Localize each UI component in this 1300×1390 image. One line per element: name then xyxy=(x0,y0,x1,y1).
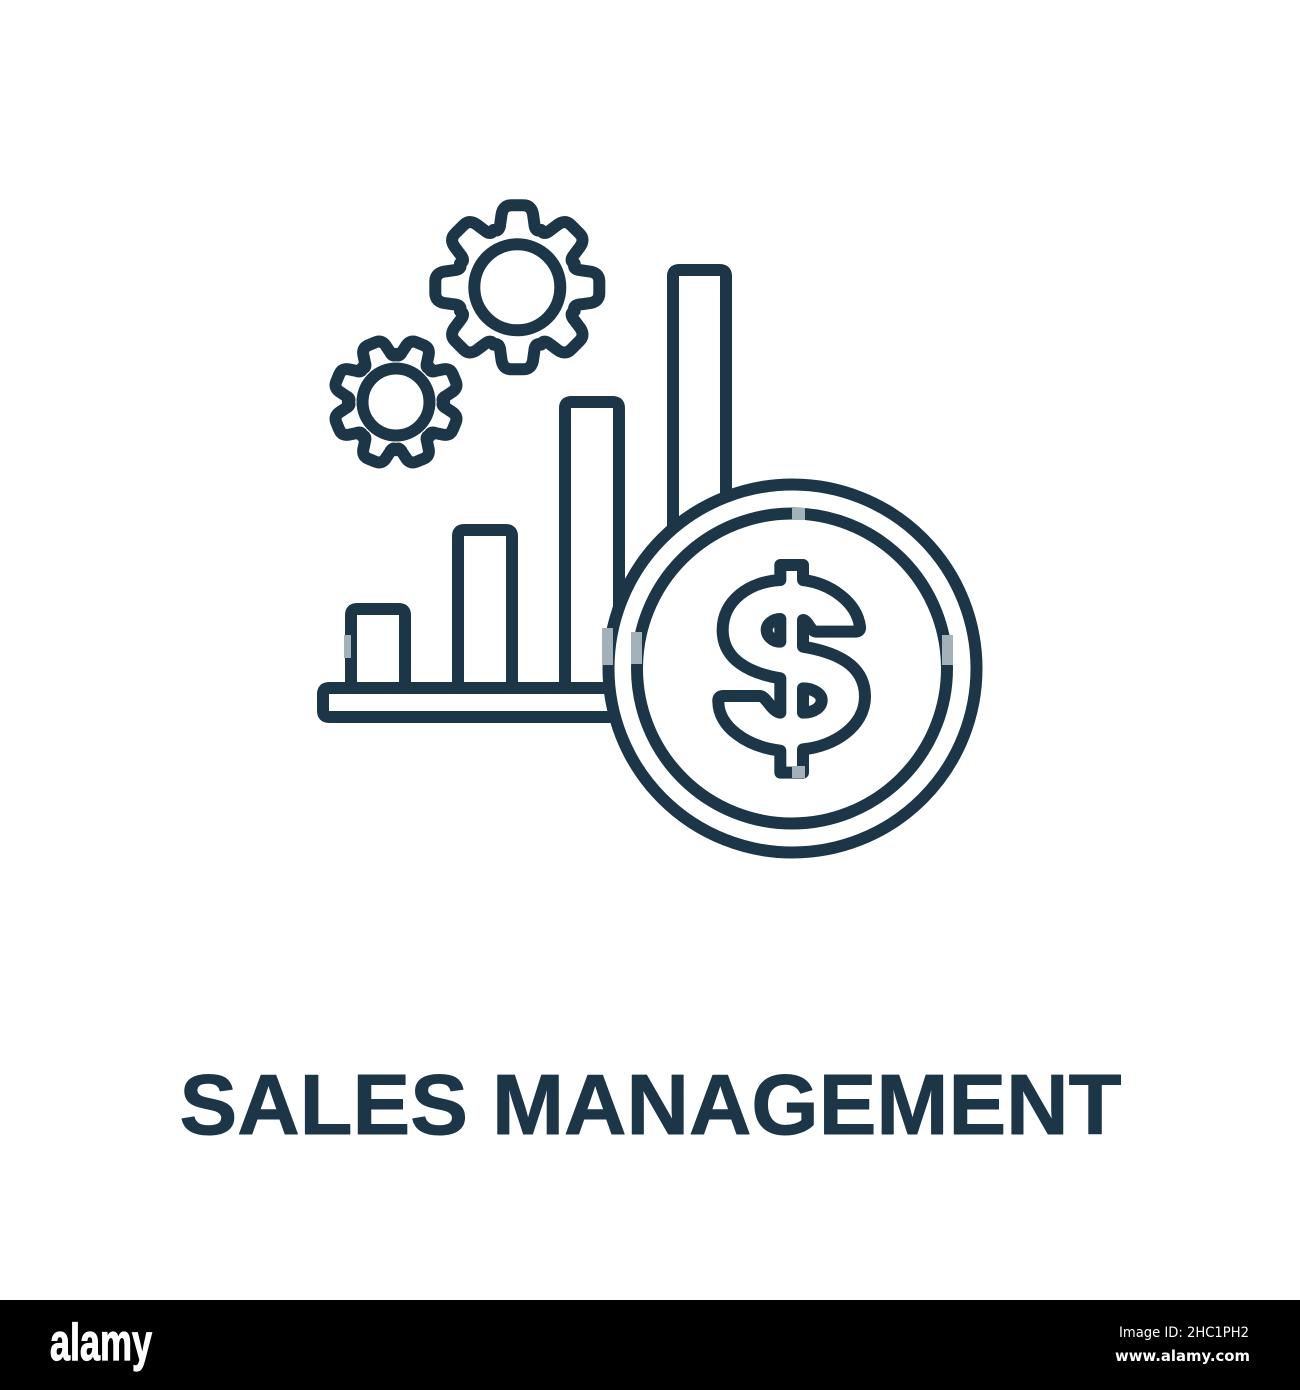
icon: dollar coin xyxy=(608,484,976,852)
bar 3 xyxy=(565,402,619,688)
website: www.alamy.com xyxy=(1115,1347,1250,1365)
icon: large gear xyxy=(435,205,599,369)
title: SALES MANAGEMENT xyxy=(180,1058,1122,1153)
watermark fragments xyxy=(344,508,953,778)
coin inner ring xyxy=(637,514,947,824)
bar 2 xyxy=(458,530,512,688)
icon: sales management xyxy=(323,205,976,852)
dollar sign xyxy=(718,565,865,773)
bar 1 xyxy=(351,609,405,688)
image id: Image ID: 2HC1PH2 xyxy=(1119,1325,1249,1341)
chart baseline xyxy=(323,688,640,717)
alamy logo: alamy xyxy=(50,1314,152,1372)
icon: small gear xyxy=(331,337,461,467)
footer bar xyxy=(0,1300,1300,1390)
coin outer ring xyxy=(608,484,976,852)
bar 4 xyxy=(673,270,726,600)
bar chart xyxy=(323,270,726,717)
